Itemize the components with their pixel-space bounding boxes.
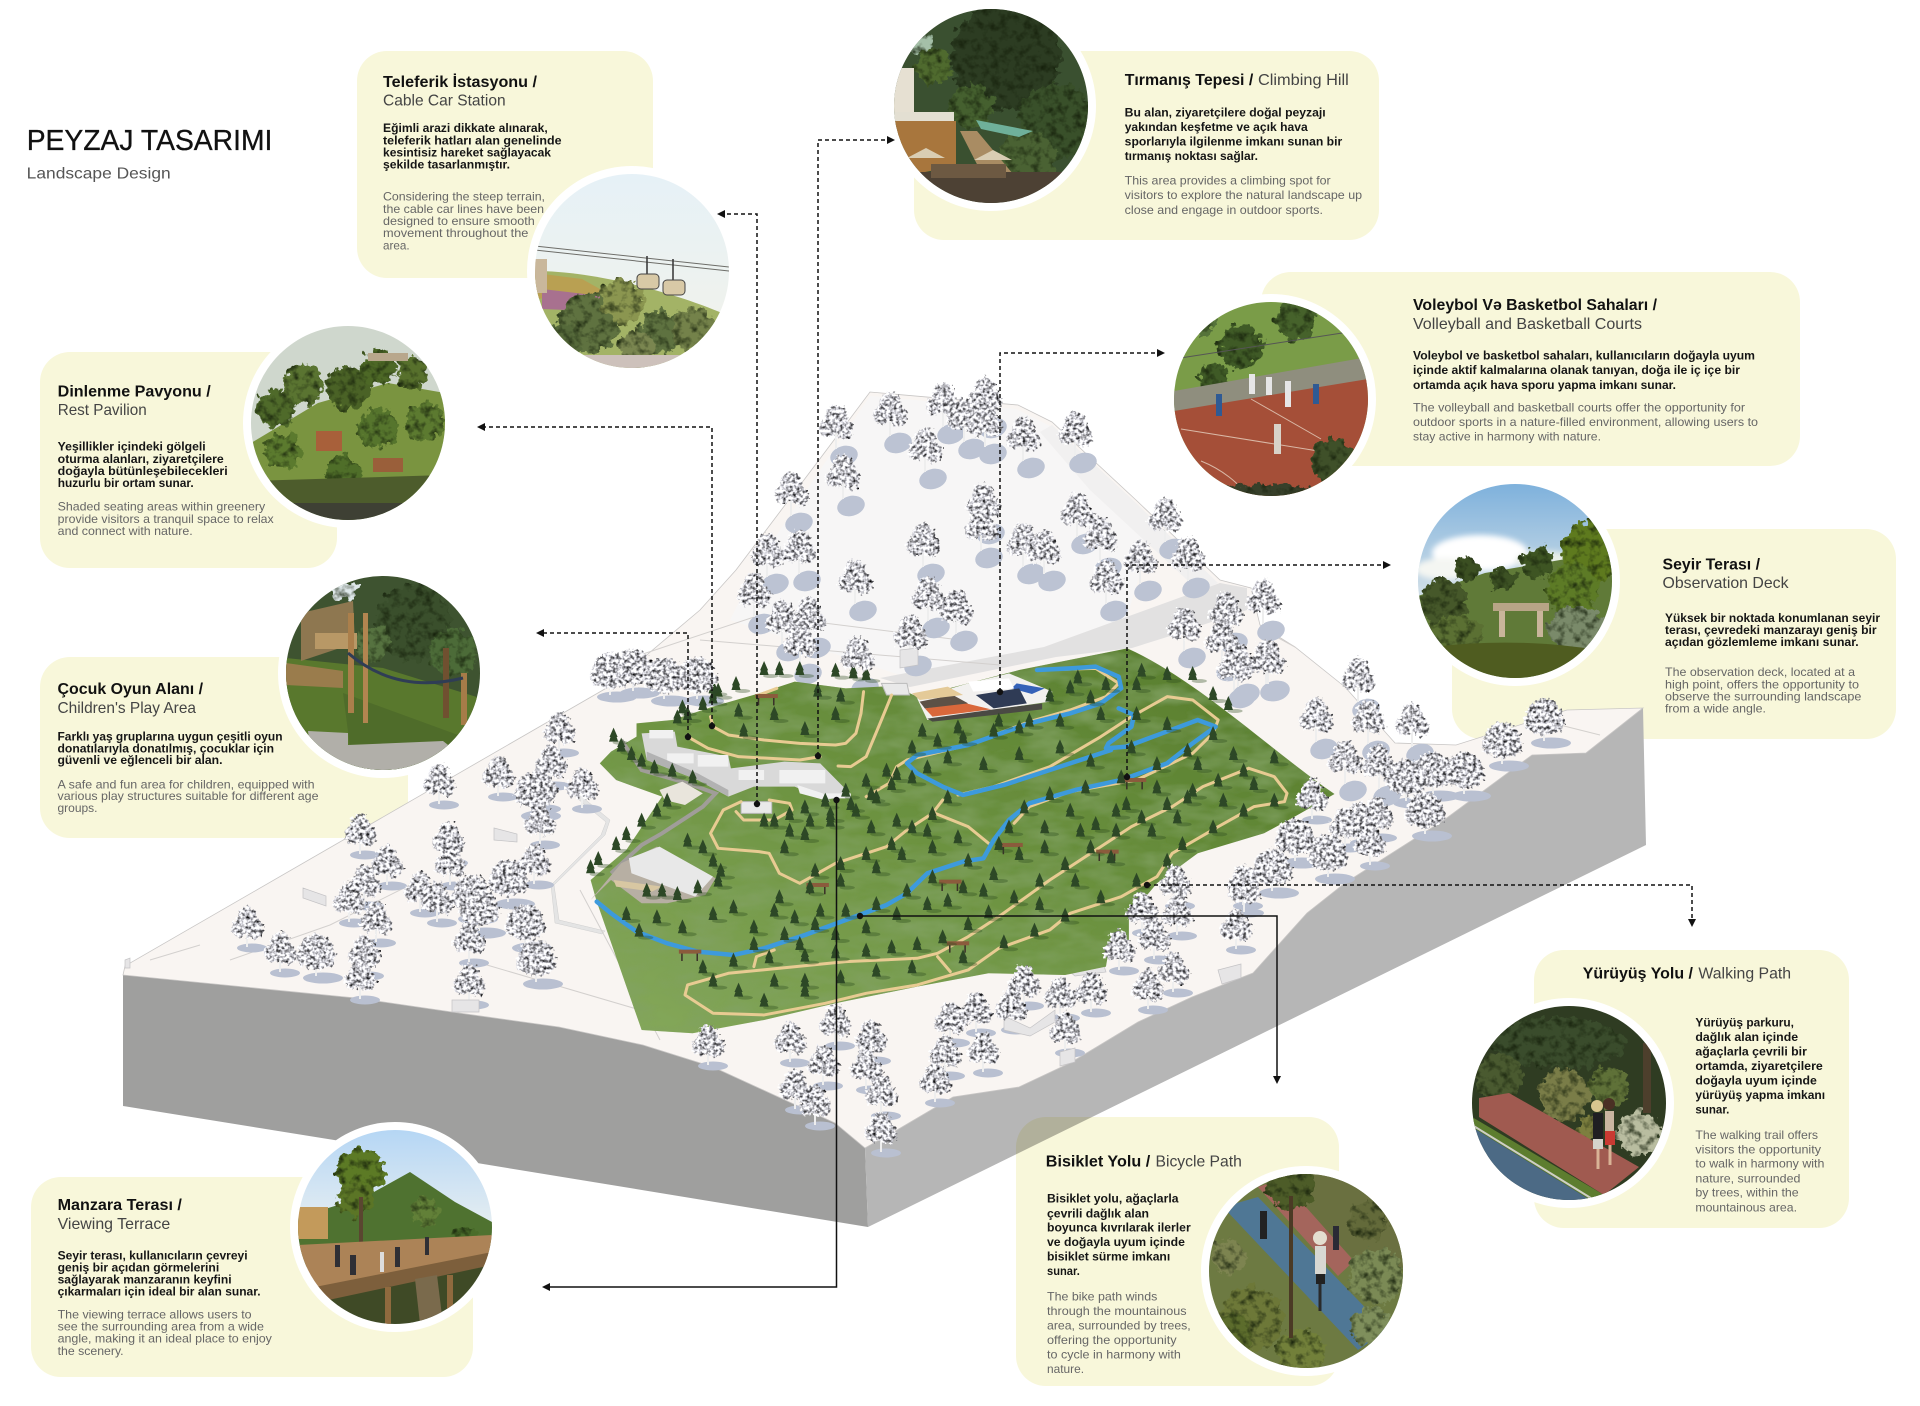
- panel: Viewing Terrace: angle, making it an ideal place to enjoy: [58, 1332, 272, 1346]
- panel: Children's Play Area: Children's Play Area: [58, 700, 196, 717]
- panel: Bicycle Path: çevrili dağlık alan: [1047, 1206, 1149, 1220]
- panel: Climbing Hill: Climbing Hill: [1258, 72, 1349, 89]
- panel: Bicycle Path: boyunca kıvrılarak ilerler: [1047, 1221, 1191, 1235]
- panel: Children's Play Area: various play structures suitable for different age: [58, 789, 319, 803]
- panel: Walking Path: by trees, within the: [1695, 1186, 1799, 1200]
- panel: Cable Car Station: the cable car lines have been: [383, 202, 544, 216]
- panel: Observation Deck: terası, çevredeki manzarayı geniş bir: [1665, 623, 1877, 637]
- panel: Rest Pavilion: huzurlu bir ortam sunar.: [58, 476, 194, 490]
- panel: Volleyball and Basketball Courts: Voleybol ve basketbol sahaları, kullanıcıların doğayla uyum: [1413, 349, 1755, 363]
- panel: Climbing Hill: tırmanış noktası sağlar.: [1125, 149, 1258, 163]
- landscaped green zone (drawn in plan coordinates): [591, 648, 1334, 1033]
- panel: Volleyball and Basketball Courts: The volleyball and basketball courts offer the opportunity for: [1413, 400, 1745, 414]
- panel: Observation Deck: high point, offers the opportunity to: [1665, 677, 1859, 691]
- panel: Bicycle Path: ve doğayla uyum içinde: [1047, 1235, 1185, 1249]
- panel: Climbing Hill: [886, 1, 1379, 240]
- panel: Walking Path: ağaçlarla çevrili bir: [1695, 1045, 1807, 1059]
- panel: Viewing Terrace: [31, 1122, 500, 1377]
- panel: Children's Play Area: Çocuk Oyun Alanı /: [58, 681, 204, 698]
- panel: Rest Pavilion: Yeşillikler içindeki gölgeli: [58, 440, 206, 454]
- panel: Walking Path: doğayla uyum içinde: [1695, 1073, 1817, 1087]
- panel: Children's Play Area: groups.: [58, 801, 98, 815]
- panel: Climbing Hill: yakından keşfetme ve açık hava: [1125, 120, 1308, 134]
- panel: Viewing Terrace: sağlayarak manzaranın keyfini: [58, 1272, 232, 1286]
- panel: Volleyball and Basketball Courts: stay active in harmony with nature.: [1413, 430, 1601, 444]
- panel: Rest Pavilion: provide visitors a tranquil space to relax: [58, 512, 274, 526]
- bicycle stream paths: [597, 667, 1216, 955]
- photo: viewing terrace: [290, 1122, 500, 1332]
- panel: Observation Deck: açıdan gözlemleme imkanı sunar.: [1665, 635, 1859, 649]
- panel: Bicycle Path: Bisiklet yolu, ağaçlarla: [1047, 1192, 1179, 1206]
- panel: Children's Play Area: A safe and fun area for children, equipped with: [58, 777, 314, 791]
- panel: Volleyball and Basketball Courts: Volleyball and Basketball Courts: [1413, 316, 1642, 333]
- photo: sports courts: [1166, 294, 1376, 509]
- arrow: bicycle path leader: [857, 913, 1281, 1084]
- panel: Observation Deck: Seyir Terası /: [1662, 557, 1761, 574]
- panel: Cable Car Station: Considering the steep terrain,: [383, 190, 545, 204]
- panel: Observation Deck: from a wide angle.: [1665, 702, 1766, 716]
- right gray side face: [865, 708, 1646, 1227]
- panel: Walking Path: ortamda, ziyaretçilere: [1695, 1059, 1823, 1073]
- panel: Observation Deck: Yüksek bir noktada konumlanan seyir: [1665, 611, 1880, 625]
- gazebos: [690, 696, 1135, 952]
- panel: Bicycle Path: offering the opportunity: [1047, 1333, 1177, 1347]
- top surface: [123, 392, 1643, 1148]
- panel: Bicycle Path: to cycle in harmony with: [1047, 1347, 1181, 1361]
- panel: Bicycle Path: sunar.: [1047, 1264, 1080, 1278]
- green lawn: [591, 648, 1334, 1033]
- mountain face highlight: [730, 396, 1150, 675]
- photo: rest pavilion: [243, 318, 453, 528]
- panel: Cable Car Station: teleferik hatları alan genelinde: [383, 133, 562, 147]
- panel: Children's Play Area: donatılarıyla donatılmış, çocuklar için: [58, 741, 274, 755]
- panel: Rest Pavilion: doğayla bütünleşebilecekleri: [58, 464, 228, 478]
- title: Peyzaj Tasarımı: PEYZAJ TASARIMI: [27, 125, 272, 157]
- panel: Cable Car Station: şekilde tasarlanmıştır.: [383, 158, 510, 172]
- panel: Rest Pavilion: Rest Pavilion: [58, 402, 147, 419]
- panel: Walking Path: [1464, 950, 1849, 1228]
- panel: Cable Car Station: [357, 51, 737, 376]
- rock blocks on terrain: [125, 648, 1241, 1066]
- panel: Bicycle Path: nature.: [1047, 1362, 1084, 1376]
- photo: climbing hill: [886, 1, 1096, 211]
- panel: Children's Play Area: [40, 568, 488, 838]
- panel: Viewing Terrace: The viewing terrace allows users to: [58, 1308, 252, 1322]
- panel: Children's Play Area: güvenli ve eğlenceli bir alan.: [58, 753, 222, 767]
- panel: Bicycle Path: through the mountainous: [1047, 1304, 1187, 1318]
- panel: Cable Car Station: designed to ensure smooth: [383, 214, 535, 228]
- panel: Observation Deck: Observation Deck: [1662, 575, 1789, 592]
- arrow: cable car leader: [717, 210, 760, 807]
- panel: Climbing Hill: visitors to explore the natural landscape up: [1125, 188, 1362, 202]
- panel: Viewing Terrace: Viewing Terrace: [58, 1216, 170, 1233]
- panel: Observation Deck: observe the surrounding landscape: [1665, 689, 1862, 703]
- arrow: viewing terrace leader: [542, 797, 840, 1291]
- panel: Cable Car Station: Eğimli arazi dikkate alınarak,: [383, 121, 548, 135]
- panel: Viewing Terrace: geniş bir açıdan görmelerini: [58, 1260, 219, 1274]
- buildings row: [642, 730, 851, 802]
- photo: observation deck: [1410, 476, 1625, 686]
- panel: Climbing Hill: Tırmanış Tepesi /: [1125, 72, 1254, 89]
- panel: Rest Pavilion: [40, 318, 453, 568]
- small white blocks: [741, 683, 909, 813]
- panel: Climbing Hill: close and engage in outdoor sports.: [1125, 203, 1323, 217]
- panel: Observation Deck: [1410, 476, 1896, 739]
- panel: Cable Car Station: movement throughout the: [383, 226, 529, 240]
- panel: Observation Deck: The observation deck, located at a: [1665, 665, 1855, 679]
- panel: Viewing Terrace: the scenery.: [58, 1344, 124, 1358]
- left gray side face: [123, 975, 868, 1227]
- panel: Bicycle Path: bisiklet sürme imkanı: [1047, 1250, 1170, 1264]
- sunken amphitheatre: [591, 847, 716, 903]
- arrow: rest pavilion leader: [477, 423, 715, 729]
- panel: Children's Play Area: Farklı yaş gruplarına uygun çeşitli oyun: [58, 730, 282, 744]
- panel: Walking Path: Yürüyüş parkuru,: [1695, 1016, 1794, 1030]
- panel: Walking Path: Yürüyüş Yolu /: [1583, 965, 1694, 982]
- panel: Walking Path: nature, surrounded: [1695, 1171, 1800, 1185]
- photo: walking path: [1464, 998, 1674, 1208]
- panel: Volleyball and Basketball Courts: ortamda açık hava sporu yapma imkanı sunar.: [1413, 378, 1676, 392]
- panel: Walking Path: The walking trail offers: [1695, 1128, 1818, 1142]
- walking paths: [685, 668, 1287, 1015]
- arrow: walking path leader: [1144, 882, 1696, 927]
- panel: Volleyball and Basketball Courts: outdoor sports in a nature-filled environment, allowing users to: [1413, 415, 1758, 429]
- retaining wall: [880, 583, 1247, 687]
- panel: Climbing Hill: This area provides a climbing spot for: [1125, 174, 1331, 188]
- panel: Bicycle Path: The bike path winds: [1047, 1290, 1157, 1304]
- terrain model: [123, 392, 1646, 1227]
- panel: Bicycle Path: [1016, 1117, 1411, 1386]
- panel: Volleyball and Basketball Courts: içinde aktif kalmalarına olanak tanıyan, doğa ile iç içe bir: [1413, 363, 1740, 377]
- panel: Bicycle Path: area, surrounded by trees,: [1047, 1318, 1191, 1332]
- arrow: sports courts leader: [997, 349, 1165, 695]
- panel: Rest Pavilion: Dinlenme Pavyonu /: [58, 383, 211, 400]
- panel: Climbing Hill: Bu alan, ziyaretçilere doğal peyzajı: [1125, 105, 1326, 119]
- sports complex: [912, 673, 1052, 722]
- panel: Walking Path: dağlık alan içinde: [1695, 1030, 1798, 1044]
- road: [611, 740, 716, 873]
- white tree canopies: [247, 397, 1544, 1130]
- panel: Walking Path: visitors the opportunity: [1695, 1142, 1821, 1156]
- curved road wall: [551, 782, 610, 934]
- title: Peyzaj Tasarımı: Landscape Design: [27, 166, 171, 183]
- panel: Rest Pavilion: oturma alanları, ziyaretçilere: [58, 452, 224, 466]
- photo: bicycle path: [1201, 1162, 1411, 1377]
- pine trees: [591, 675, 1274, 1007]
- tree shadows and trunks: [247, 397, 1544, 1130]
- photo: cable car: [527, 166, 737, 376]
- arrow: observation deck leader: [1124, 561, 1391, 780]
- panel: Walking Path: to walk in harmony with: [1695, 1157, 1824, 1171]
- panel: Cable Car Station: Cable Car Station: [383, 93, 506, 110]
- panel: Cable Car Station: kesintisiz hareket sağlayacak: [383, 145, 551, 159]
- panel: Bicycle Path: Bisiklet Yolu /: [1046, 1154, 1151, 1171]
- photo: play area: [278, 568, 488, 778]
- panel: Rest Pavilion: Shaded seating areas within greenery: [58, 500, 265, 514]
- panel: Walking Path: Walking Path: [1698, 965, 1791, 982]
- tent canopy: [659, 782, 703, 805]
- panel: Bicycle Path: Bicycle Path: [1156, 1154, 1242, 1171]
- arrow: play area leader: [536, 629, 691, 740]
- panel: Rest Pavilion: and connect with nature.: [58, 524, 193, 538]
- arrow: climbing hill leader: [815, 136, 895, 759]
- panel: Viewing Terrace: Manzara Terası /: [58, 1197, 182, 1214]
- panel: Walking Path: sunar.: [1695, 1102, 1729, 1116]
- panel: Volleyball and Basketball Courts: [1166, 272, 1800, 509]
- panel: Volleyball and Basketball Courts: Voleybol Və Basketbol Sahaları /: [1413, 297, 1658, 314]
- mountain slope shading: [1040, 425, 1218, 592]
- title: Peyzaj Tasarımı: [27, 125, 272, 183]
- panel: Walking Path: yürüyüş yapma imkanı: [1695, 1088, 1825, 1102]
- panel: Viewing Terrace: see the surrounding area from a wide: [58, 1320, 264, 1334]
- panel: Cable Car Station: area.: [383, 238, 410, 252]
- panel: Climbing Hill: sporlarıyla ilgilenme imkanı sunan bir: [1125, 134, 1343, 148]
- panel: Cable Car Station: Teleferik İstasyonu /: [383, 73, 538, 91]
- panel: Walking Path: mountainous area.: [1695, 1200, 1797, 1214]
- panel: Viewing Terrace: Seyir terası, kullanıcıların çevreyi: [58, 1248, 248, 1262]
- panel: Viewing Terrace: çıkarmaları için ideal bir alan sunar.: [58, 1284, 261, 1298]
